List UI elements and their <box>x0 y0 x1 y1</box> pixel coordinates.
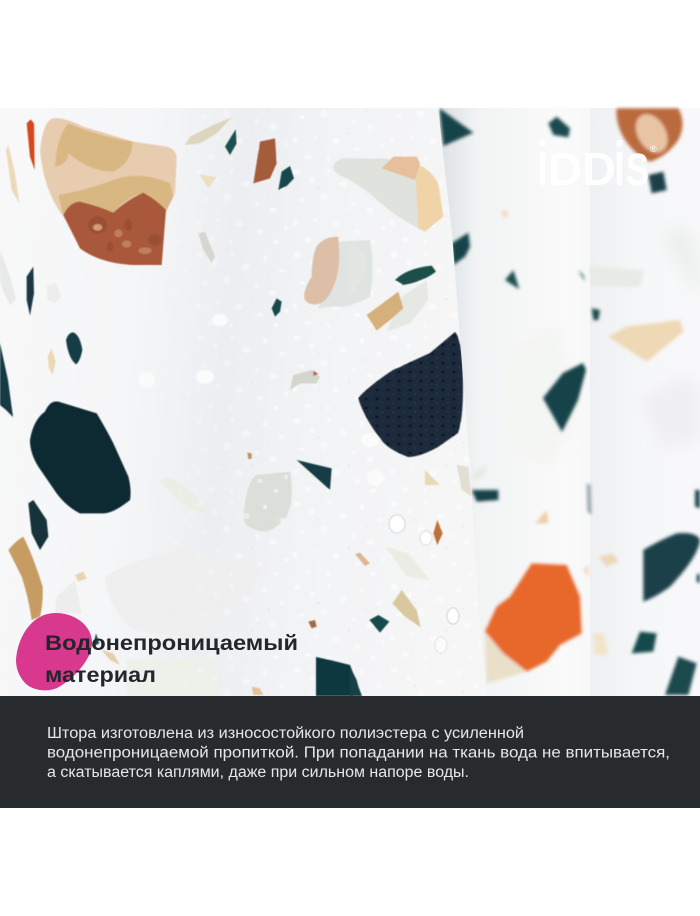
left edge dark chip <box>0 343 13 417</box>
description line 3: а скатывается каплями, даже при сильном напоре воды. <box>47 764 469 781</box>
description line 1: Штора изготовлена из износостойкого полиэстера с усиленной <box>47 725 524 742</box>
infographic canvas <box>0 106 700 808</box>
large pale shapes <box>55 472 292 697</box>
logo: iddis: ® <box>650 144 657 154</box>
description text <box>47 725 670 781</box>
water droplet texture <box>164 110 464 692</box>
bottom teal chip <box>316 657 362 696</box>
logo: iddis: S <box>626 144 649 195</box>
small chips, upper left <box>0 117 372 390</box>
back curtain fold middle <box>440 108 590 696</box>
logo: iddis: i <box>537 130 548 199</box>
heading line 1: Водонепроницаемый <box>45 632 298 655</box>
shapes, upper right of front panel <box>333 157 443 332</box>
front curtain panel <box>0 108 487 696</box>
terrazzo shapes on front curtain <box>0 108 490 697</box>
photo: shower curtain <box>0 108 700 697</box>
small chips, lower right of front panel <box>350 465 472 697</box>
large tan and brown shape <box>40 118 177 265</box>
pink accent blob <box>16 613 92 690</box>
back curtain fold right <box>590 108 700 696</box>
blurred terrazzo shapes on back curtain <box>439 108 700 695</box>
heading <box>45 632 298 687</box>
description line 2: водонепроницаемой пропиткой. При попадании на ткань вода не впитывается, <box>47 744 670 762</box>
dark description band <box>0 696 700 808</box>
large water droplets <box>139 314 459 653</box>
large dark navy chip <box>358 332 463 457</box>
logo: iddis: DD <box>548 143 616 195</box>
logo: iddis <box>537 130 657 199</box>
heading line 2: материал <box>45 664 156 687</box>
logo: iddis: i <box>614 130 625 199</box>
lower left dark chips <box>8 401 332 695</box>
